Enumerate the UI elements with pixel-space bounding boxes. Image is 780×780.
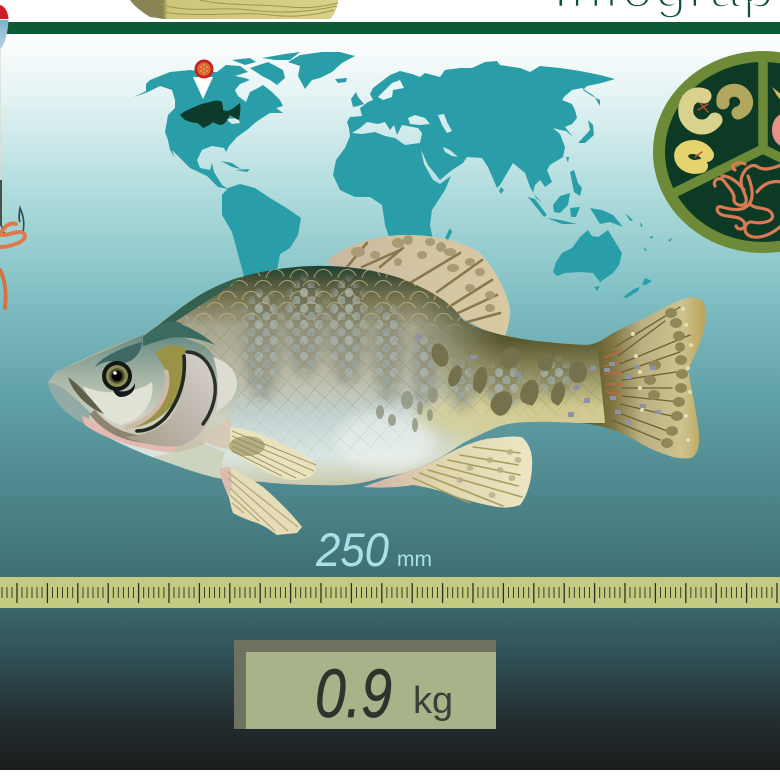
Africa and Eurasia: [333, 61, 615, 240]
South America: [222, 184, 301, 280]
gill cover: [125, 353, 217, 446]
weight value: 0.9: [315, 655, 392, 732]
pale preopercle stroke: [125, 370, 167, 428]
gill lobe: [213, 357, 237, 412]
mouth line: [68, 377, 104, 414]
tail blotches: [428, 341, 587, 416]
Pacific islets: [625, 213, 672, 251]
grub larvae: [681, 90, 747, 167]
earthworms: [714, 163, 780, 237]
fish body: [40, 260, 610, 490]
Australia: [553, 230, 622, 282]
Cuba and Caribbean: [221, 161, 250, 172]
Tasmania: [594, 286, 600, 291]
tail fin: [580, 297, 705, 458]
length readout: [315, 523, 432, 576]
grub and caterpillar right panel: [772, 87, 780, 146]
bobber: [0, 5, 8, 50]
header bar: [0, 22, 780, 34]
head: [48, 332, 240, 455]
measuring tape: [0, 577, 780, 608]
boat hull: [130, 0, 338, 19]
panel dividers: [674, 55, 780, 193]
lower jaw: [48, 383, 90, 426]
belly front: [152, 444, 225, 478]
eye: [102, 361, 135, 397]
length value: 250: [315, 523, 389, 576]
pectoral base: [203, 417, 236, 449]
crappie fish illustration: [40, 235, 705, 535]
North America: [134, 70, 283, 189]
outer gill stripe: [187, 352, 215, 424]
UK: [351, 92, 364, 107]
world map: [134, 52, 672, 298]
nape shading: [143, 321, 215, 346]
New Zealand: [623, 278, 652, 298]
weight unit: kg: [413, 680, 453, 722]
pink throat band: [82, 416, 178, 453]
nape dark band: [156, 276, 244, 328]
olive gill sweep: [125, 345, 185, 429]
Greenland: [288, 52, 355, 89]
Arctic islands: [217, 52, 300, 85]
pectoral fin: [229, 427, 316, 480]
Iceland: [335, 78, 347, 83]
dorsal fin: [325, 235, 510, 340]
diet panel: [653, 51, 780, 253]
Asian islands: [445, 120, 623, 240]
weight display: [234, 640, 496, 732]
native range fish silhouette: [180, 100, 240, 128]
anal fin: [363, 436, 532, 508]
map pin marker: [193, 60, 214, 99]
pelvic fin: [218, 467, 302, 535]
length unit: mm: [397, 548, 432, 571]
cheek highlight: [83, 382, 153, 425]
lower flank spots: [376, 387, 438, 432]
dark gill stripe: [137, 356, 184, 431]
preopercle band: [92, 412, 177, 442]
fishing hook and worm bait: [0, 50, 25, 308]
